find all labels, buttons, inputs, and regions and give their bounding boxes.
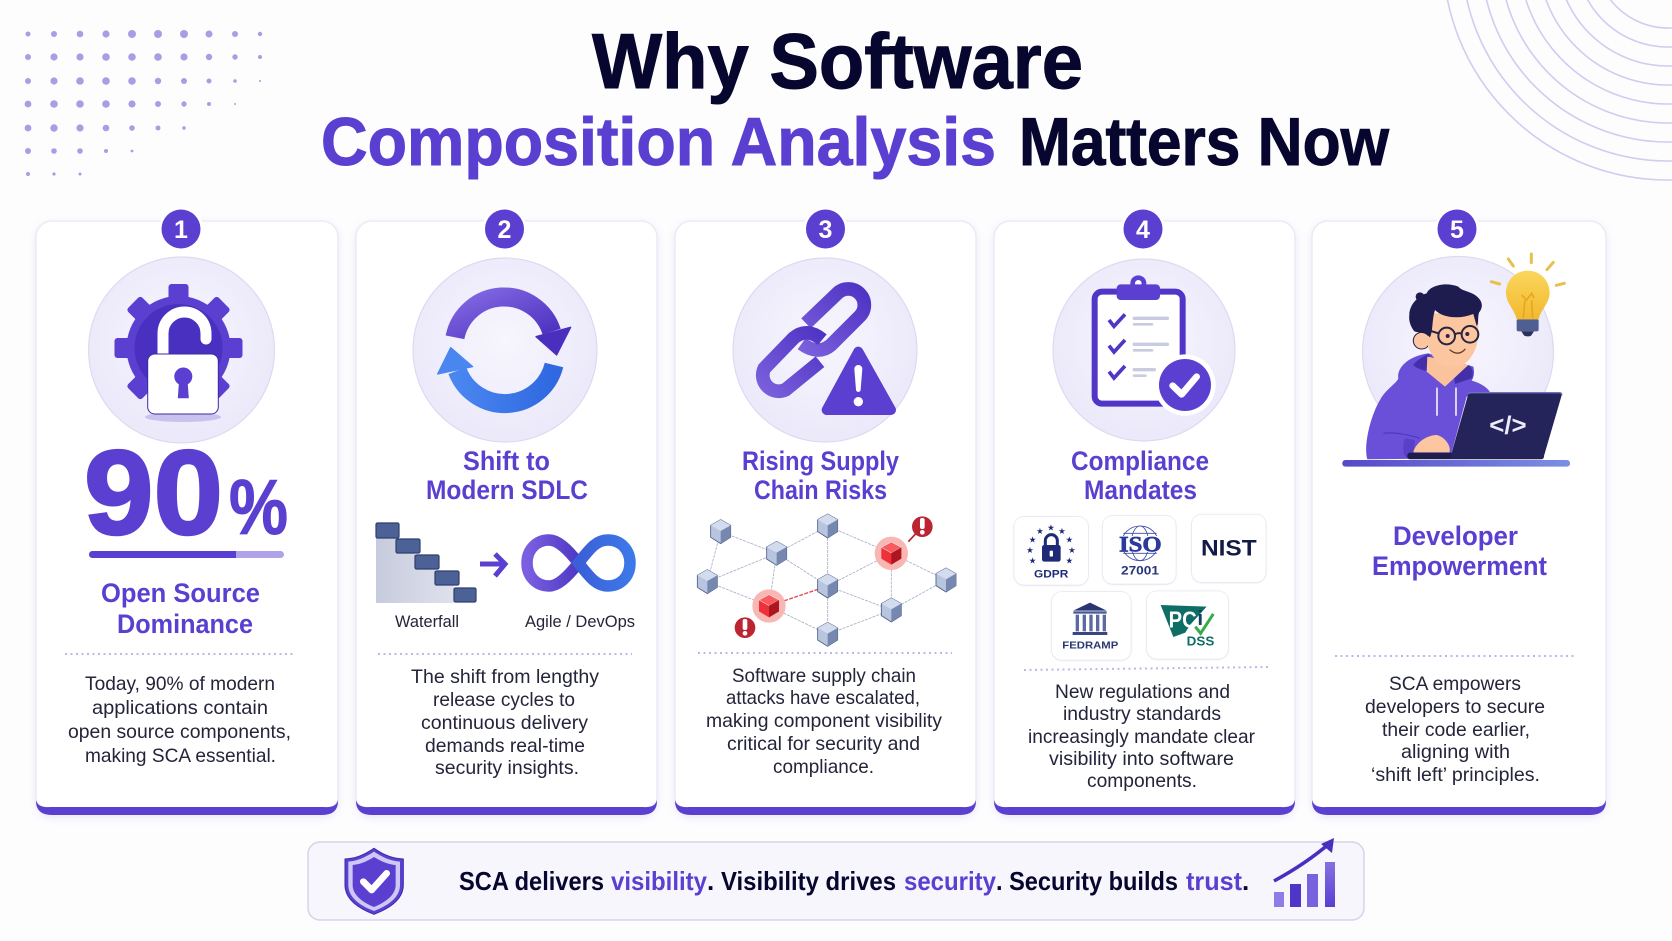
logo: PCI DSS: i — [1197, 607, 1203, 630]
laptop — [1407, 393, 1562, 459]
laptop: </> — [1489, 412, 1527, 440]
icon: cycle arrows — [413, 258, 597, 442]
stat 90%: 90 — [84, 426, 223, 560]
hoodie — [1366, 353, 1491, 459]
body text — [1365, 673, 1545, 786]
hoodie strings — [1437, 388, 1456, 415]
logo: GDPR: GDPR — [1034, 569, 1068, 581]
logo: ISO 27001: ISO — [1119, 532, 1162, 557]
body text: attacks have escalated, — [726, 687, 920, 709]
number badge 5: 5 — [1450, 216, 1464, 244]
heading: Mandates — [1084, 475, 1197, 505]
statement: security — [904, 866, 996, 896]
body text — [68, 673, 291, 767]
logo: NIST — [1192, 514, 1266, 582]
labels: Agile / DevOps — [525, 613, 635, 631]
body text: making SCA essential. — [85, 745, 276, 767]
body text: New regulations and — [1055, 681, 1230, 703]
statement: . — [1242, 866, 1249, 896]
decorative concentric arcs — [1443, 0, 1672, 180]
logo: PCI DSS — [1147, 591, 1228, 659]
logo: FedRAMP: FEDRAMP — [1062, 640, 1118, 651]
number badge 1: 1 — [174, 216, 188, 244]
light bulb — [1491, 254, 1564, 336]
icon: developer with laptop and light bulb — [1342, 254, 1570, 467]
logo: GDPR: ★ — [1029, 534, 1037, 544]
body text: compliance. — [773, 756, 874, 778]
logo: GDPR: ★ — [1029, 555, 1037, 565]
body text: developers to secure — [1365, 696, 1545, 718]
body text: Today, 90% of modern — [85, 673, 275, 695]
body text: applications contain — [92, 697, 268, 719]
body text: critical for security and — [727, 733, 920, 755]
statement: SCA delivers — [459, 866, 604, 896]
body text: open source components, — [68, 721, 291, 743]
panel: developer empowerment — [1312, 207, 1606, 815]
body text: aligning with — [1401, 741, 1510, 763]
heading: Dominance — [117, 609, 253, 639]
body text: security insights. — [435, 757, 579, 779]
body text: Software supply chain — [732, 665, 916, 687]
panel: open source dominance — [36, 207, 338, 815]
logo: PCI DSS: DSS — [1187, 635, 1214, 649]
title: Why Software — [592, 17, 1083, 105]
logo: GDPR: ★ — [1065, 555, 1073, 565]
statement: trust — [1186, 866, 1242, 896]
icon: gear with open padlock — [88, 257, 274, 443]
statement — [459, 866, 1249, 896]
heading: Empowerment — [1372, 551, 1547, 581]
labels — [395, 613, 635, 631]
body text — [411, 666, 599, 779]
logo: GDPR: ★ — [1065, 534, 1073, 544]
icon: infinity loop — [527, 540, 630, 586]
body text: their code earlier, — [1382, 719, 1530, 741]
icon: rising bar chart — [1274, 838, 1335, 907]
number badge 3 — [804, 207, 848, 251]
statement: Visibility drives — [721, 866, 896, 896]
title — [321, 17, 1390, 180]
progress bar — [89, 551, 284, 558]
alert markers — [735, 516, 933, 638]
body text — [1028, 681, 1255, 792]
compliance logos — [1014, 514, 1266, 660]
number badge 1 — [159, 207, 203, 251]
stat 90%: % — [229, 463, 288, 551]
body text — [706, 665, 942, 778]
heading: Chain Risks — [754, 475, 887, 505]
logo: GDPR: ★ — [1047, 523, 1055, 533]
heading: Developer — [1393, 521, 1518, 551]
body text: SCA empowers — [1389, 673, 1521, 695]
heading: Shift to — [463, 446, 550, 476]
heading — [101, 578, 260, 639]
statement: . Security builds — [996, 866, 1178, 896]
number badge 2: 2 — [498, 216, 511, 244]
body text: industry standards — [1063, 703, 1221, 725]
logo: ISO 27001: 27001 — [1121, 564, 1160, 577]
number badge 3: 3 — [819, 216, 832, 244]
panel: rising supply chain risks — [675, 207, 976, 815]
body text: release cycles to — [433, 689, 575, 711]
number badge 4 — [1121, 207, 1165, 251]
panel: compliance mandates — [994, 207, 1295, 815]
logo: GDPR: ★ — [1068, 545, 1076, 555]
neck — [1427, 357, 1468, 387]
heading: Rising Supply — [742, 446, 899, 476]
stat 90% — [84, 426, 288, 560]
number badge 5 — [1435, 207, 1479, 251]
body text: increasingly mandate clear — [1028, 726, 1255, 748]
body text: components. — [1087, 770, 1197, 792]
statement: . — [707, 866, 714, 896]
number badge 2 — [482, 207, 526, 251]
logo: GDPR: ★ — [1036, 526, 1044, 536]
body text: demands real-time — [425, 735, 585, 757]
body text: visibility into software — [1049, 748, 1234, 770]
heading — [1071, 446, 1209, 505]
body text: making component visibility — [706, 710, 942, 732]
icon: shield with check — [345, 848, 403, 914]
labels: Waterfall — [395, 613, 459, 631]
icon: broken chain with warning — [733, 258, 917, 442]
statement: visibility — [611, 866, 707, 896]
desk — [1342, 460, 1570, 467]
head — [1409, 284, 1482, 367]
icon: clipboard checklist — [1053, 259, 1235, 441]
logo: GDPR — [1014, 517, 1088, 585]
logo: FedRAMP — [1052, 592, 1131, 660]
logo: PCI DSS: PC — [1169, 606, 1197, 632]
heading: Compliance — [1071, 446, 1209, 476]
body text: The shift from lengthy — [411, 666, 599, 688]
logo: GDPR: ★ — [1026, 545, 1034, 555]
heading — [1372, 521, 1547, 581]
title: Matters Now — [1019, 104, 1390, 180]
arrow — [480, 554, 505, 576]
panel: shift to modern SDLC — [356, 207, 657, 815]
body text: continuous delivery — [421, 712, 588, 734]
waterfall diagram — [376, 523, 476, 603]
heading — [742, 446, 899, 505]
logo: ISO 27001 — [1103, 516, 1176, 584]
number badge 4: 4 — [1136, 216, 1150, 244]
heading: Modern SDLC — [426, 475, 588, 505]
network diagram — [697, 514, 956, 646]
heading: Open Source — [101, 578, 260, 608]
body text: ‘shift left’ principles. — [1371, 764, 1540, 786]
callout banner — [308, 838, 1364, 920]
logo: NIST: NIST — [1201, 536, 1257, 561]
heading — [426, 446, 588, 505]
title: Composition Analysis — [321, 104, 996, 180]
decorative dot grid — [25, 30, 262, 176]
logo: GDPR: ★ — [1058, 526, 1066, 536]
